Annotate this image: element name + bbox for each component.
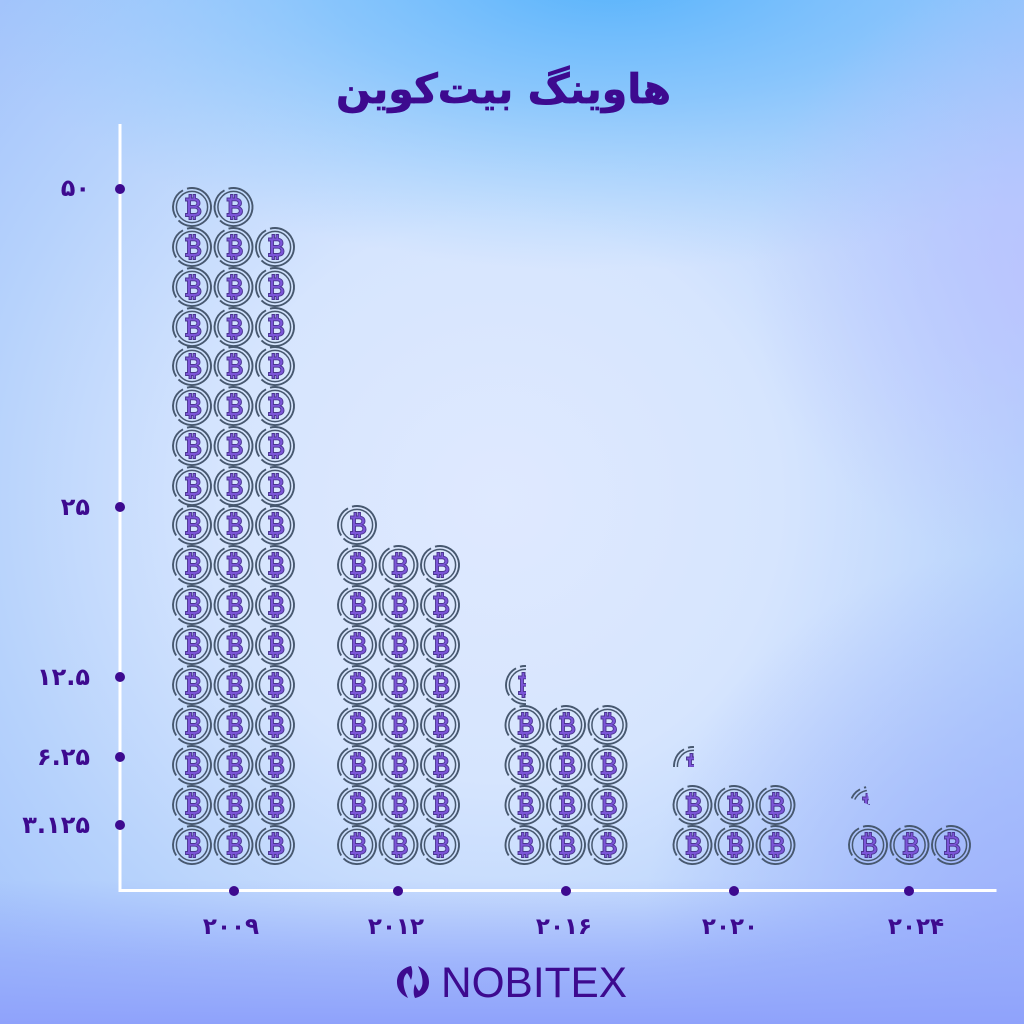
logo: Nobitex bbox=[397, 959, 627, 1007]
year 2020: ۲۰۲۰ bbox=[702, 914, 758, 940]
tick 25: ۲۵ bbox=[61, 493, 90, 521]
tick 50 bbox=[61, 174, 125, 202]
icon: Nobitex mark bbox=[397, 966, 429, 998]
year 2012: ۲۰۱۲ bbox=[368, 914, 424, 940]
tick 6.25: ۶.۲۵ bbox=[37, 743, 90, 771]
wordmark: NOBITEX bbox=[441, 959, 627, 1007]
coin column: 2012 bbox=[338, 506, 459, 864]
y-axis labels and ticks bbox=[22, 174, 125, 839]
year 2012 bbox=[368, 886, 424, 940]
chart axes bbox=[118, 124, 996, 892]
tick 6.25 bbox=[37, 743, 125, 771]
tick 3.125 bbox=[22, 811, 125, 839]
title: هاوینگ بیت‌کوین bbox=[336, 65, 671, 114]
coin column: 2009 bbox=[173, 188, 294, 864]
coin column: 2020 bbox=[674, 747, 795, 864]
tick 50: ۵۰ bbox=[61, 174, 90, 202]
tick 25 bbox=[61, 493, 125, 521]
year 2024 bbox=[888, 886, 944, 940]
coin column: 2024 bbox=[849, 787, 970, 864]
year 2016 bbox=[536, 886, 592, 940]
year 2009: ۲۰۰۹ bbox=[203, 914, 259, 940]
year 2024: ۲۰۲۴ bbox=[888, 914, 944, 940]
year 2016: ۲۰۱۶ bbox=[536, 914, 592, 940]
coin column: 2016 bbox=[506, 666, 627, 864]
year 2009 bbox=[203, 886, 259, 940]
tick 3.125: ۳.۱۲۵ bbox=[22, 811, 90, 839]
tick 12.5 bbox=[37, 663, 125, 691]
year 2020 bbox=[702, 886, 758, 940]
tick 12.5: ۱۲.۵ bbox=[37, 663, 90, 691]
x-axis labels and ticks bbox=[203, 886, 944, 940]
